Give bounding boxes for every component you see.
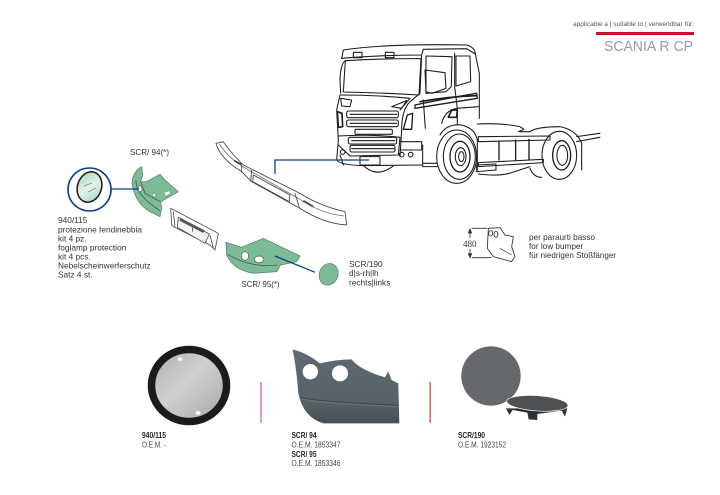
caption: 940/115: O.E.M. - [142, 440, 166, 450]
red divider 2 [430, 382, 431, 423]
lens glare marks [84, 183, 96, 192]
dimension value: 480 [463, 239, 477, 249]
text block: 940/115 description: kit 4 pz. [58, 234, 87, 244]
part: SCR/ 95 bumper corner [226, 238, 341, 288]
caption: SCR/190: SCR/190 [458, 431, 485, 440]
caption: SCR/190: O.E.M. 1923152 [458, 440, 506, 450]
text block: SCR/190 [349, 259, 390, 288]
bumper line drawing [216, 142, 347, 225]
low bumper dimension drawing [468, 228, 515, 262]
text block: low bumper note: für niedrigen Stoßfänger [529, 251, 616, 260]
text block: 940/115 description [58, 215, 151, 280]
model name: SCANIA R CP [604, 38, 693, 55]
leader to bracket [111, 188, 139, 190]
label: SCR/ 94: SCR/ 94(*) [130, 147, 169, 157]
photo: bumper corner [293, 349, 399, 423]
blue callout ring [68, 168, 111, 211]
text block: SCR/190: SCR/190 [349, 259, 383, 269]
dimension label 480 [461, 238, 478, 249]
text block: 940/115 description: 940/115 [58, 215, 88, 225]
red header bar [596, 32, 694, 35]
text block: 940/115 description: Nebelscheinwerferschutz [58, 260, 151, 270]
text block: SCR/190: rechts|links [349, 278, 390, 288]
caption: 940/115: 940/115 [142, 431, 166, 440]
caption: SCR/ 94 and SCR/ 95: SCR/ 95 [292, 450, 317, 459]
part: SCR/ 94 bracket [132, 167, 178, 217]
text block: low bumper note: per paraurti basso [529, 233, 595, 242]
caption: SCR/ 94 and SCR/ 95: O.E.M. 1853347 [292, 440, 341, 450]
lens [73, 169, 106, 205]
applicability caption: applicable a | suitable to | verwendbar für: [573, 22, 694, 28]
red divider 1 [260, 382, 262, 423]
text block: low bumper note: for low bumper [529, 242, 583, 251]
text block: 940/115 description: kit 4 pcs. [58, 252, 91, 262]
leader line: bumper to truck [275, 160, 369, 174]
header: applicability [573, 22, 694, 55]
part: mounting grille [171, 208, 218, 250]
caption: 940/115 [142, 431, 166, 450]
text block: low bumper note [529, 233, 616, 260]
green cap [316, 261, 341, 288]
text block: 940/115 description: Satz 4 st. [58, 270, 93, 280]
caption: SCR/ 94 and SCR/ 95: O.E.M. 1853346 [292, 459, 341, 468]
text block: 940/115 description: protezione fendinebbia [58, 224, 142, 234]
photo: cap SCR/190 [461, 346, 568, 420]
photo: foglamp protection [152, 350, 226, 422]
caption: SCR/190 [458, 431, 506, 450]
label: SCR/ 95: SCR/ 95(*) [242, 279, 280, 289]
caption: SCR/ 94 and SCR/ 95: SCR/ 94 [292, 431, 317, 440]
text block: 940/115 description: foglamp protection [58, 242, 127, 252]
foglamp protection circle callout [68, 168, 139, 211]
text block: SCR/190: d|s-rh|lh [349, 268, 379, 278]
caption: SCR/ 94 and SCR/ 95 [292, 431, 341, 468]
truck line drawing [337, 45, 600, 183]
leader to cap [275, 256, 315, 272]
